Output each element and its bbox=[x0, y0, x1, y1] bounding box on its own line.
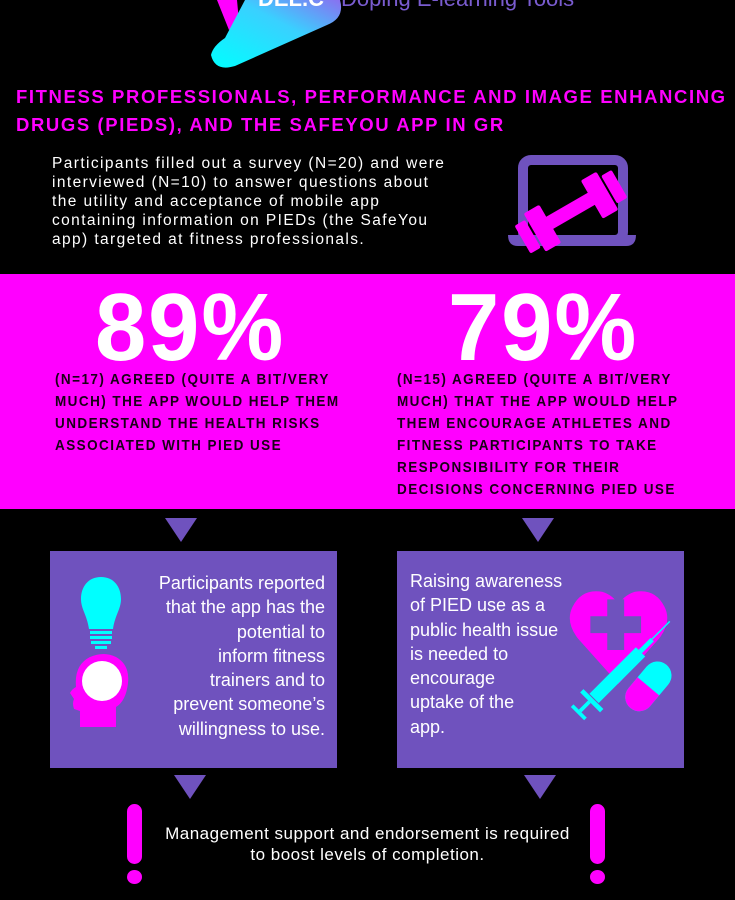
text: left box bbox=[159, 573, 325, 739]
icon: laptop with dumbbell bbox=[508, 155, 636, 253]
text: right box: uptake of the bbox=[410, 692, 514, 712]
arrow right bbox=[522, 518, 554, 542]
caption: 79%: DECISIONS CONCERNING PIED USE bbox=[397, 481, 676, 498]
panel: right box bbox=[397, 551, 684, 768]
title: FITNESS PROFESSIONALS, PERFORMANCE AND IMAGE ENHANCING bbox=[16, 86, 727, 107]
text: left box: inform fitness bbox=[218, 646, 325, 666]
intro text: the utility and acceptance of mobile app bbox=[52, 193, 380, 210]
icon: exclamation right bbox=[590, 804, 605, 884]
caption: 89%: UNDERSTAND THE HEALTH RISKS bbox=[55, 415, 321, 432]
panel: statistics band bbox=[0, 274, 735, 509]
icon: exclamation left bbox=[127, 804, 142, 884]
stat: 89%: 89% bbox=[95, 274, 285, 381]
intro text: Participants filled out a survey (N=20) and were bbox=[52, 155, 445, 172]
text: left box: that the app has the bbox=[166, 597, 325, 617]
text: conclusion: Management support and endorsement is required bbox=[165, 824, 570, 843]
title bbox=[16, 86, 727, 135]
intro text bbox=[52, 155, 445, 248]
text: conclusion bbox=[165, 824, 570, 864]
caption: 89%: MUCH) THE APP WOULD HELP THEM bbox=[55, 393, 340, 410]
text: right box: of PIED use as a bbox=[410, 595, 545, 615]
title: DRUGS (PIEDS), AND THE SAFEYOU APP IN GR bbox=[16, 114, 505, 135]
caption: 79%: (N=15) AGREED (QUITE A BIT/VERY bbox=[397, 371, 672, 388]
text: left box: prevent someone’s bbox=[173, 694, 325, 714]
text: right box: public health issue bbox=[410, 620, 558, 640]
caption: 79%: FITNESS PARTICIPANTS TO TAKE bbox=[397, 437, 658, 454]
intro text: interviewed (N=10) to answer questions about bbox=[52, 174, 429, 191]
text: right box: app. bbox=[410, 717, 445, 737]
caption: 79%: MUCH) THAT THE APP WOULD HELP bbox=[397, 393, 679, 410]
caption: 89%: (N=17) AGREED (QUITE A BIT/VERY bbox=[55, 371, 330, 388]
stat: 79%: 79% bbox=[448, 274, 638, 381]
text: right box: is needed to bbox=[410, 644, 508, 664]
logo bbox=[211, 0, 574, 68]
arrow left bbox=[165, 518, 197, 542]
text: left box: willingness to use. bbox=[179, 719, 325, 739]
arrow right bottom bbox=[524, 775, 556, 799]
caption: 79% bbox=[397, 371, 679, 498]
caption: 89% bbox=[55, 371, 340, 454]
icon: heart, syringe, pill bbox=[570, 591, 672, 720]
caption: 79%: RESPONSIBILITY FOR THEIR bbox=[397, 459, 620, 476]
intro text: containing information on PIEDs (the SafeYou bbox=[52, 212, 428, 229]
arrow left bottom bbox=[174, 775, 206, 799]
caption: 79%: THEM ENCOURAGE ATHLETES AND bbox=[397, 415, 672, 432]
text: left box: trainers and to bbox=[210, 670, 325, 690]
text: left box: potential to bbox=[237, 622, 325, 642]
icon: lightbulb and head bbox=[70, 577, 128, 727]
text: right box: encourage bbox=[410, 668, 495, 688]
text: conclusion: to boost levels of completion. bbox=[250, 845, 485, 864]
panel: left box bbox=[50, 551, 337, 768]
text: left box: Participants reported bbox=[159, 573, 325, 593]
intro text: app) targeted at fitness professionals. bbox=[52, 231, 365, 248]
text: right box bbox=[410, 571, 562, 737]
caption: 89%: ASSOCIATED WITH PIED USE bbox=[55, 437, 282, 454]
text: right box: Raising awareness bbox=[410, 571, 562, 591]
